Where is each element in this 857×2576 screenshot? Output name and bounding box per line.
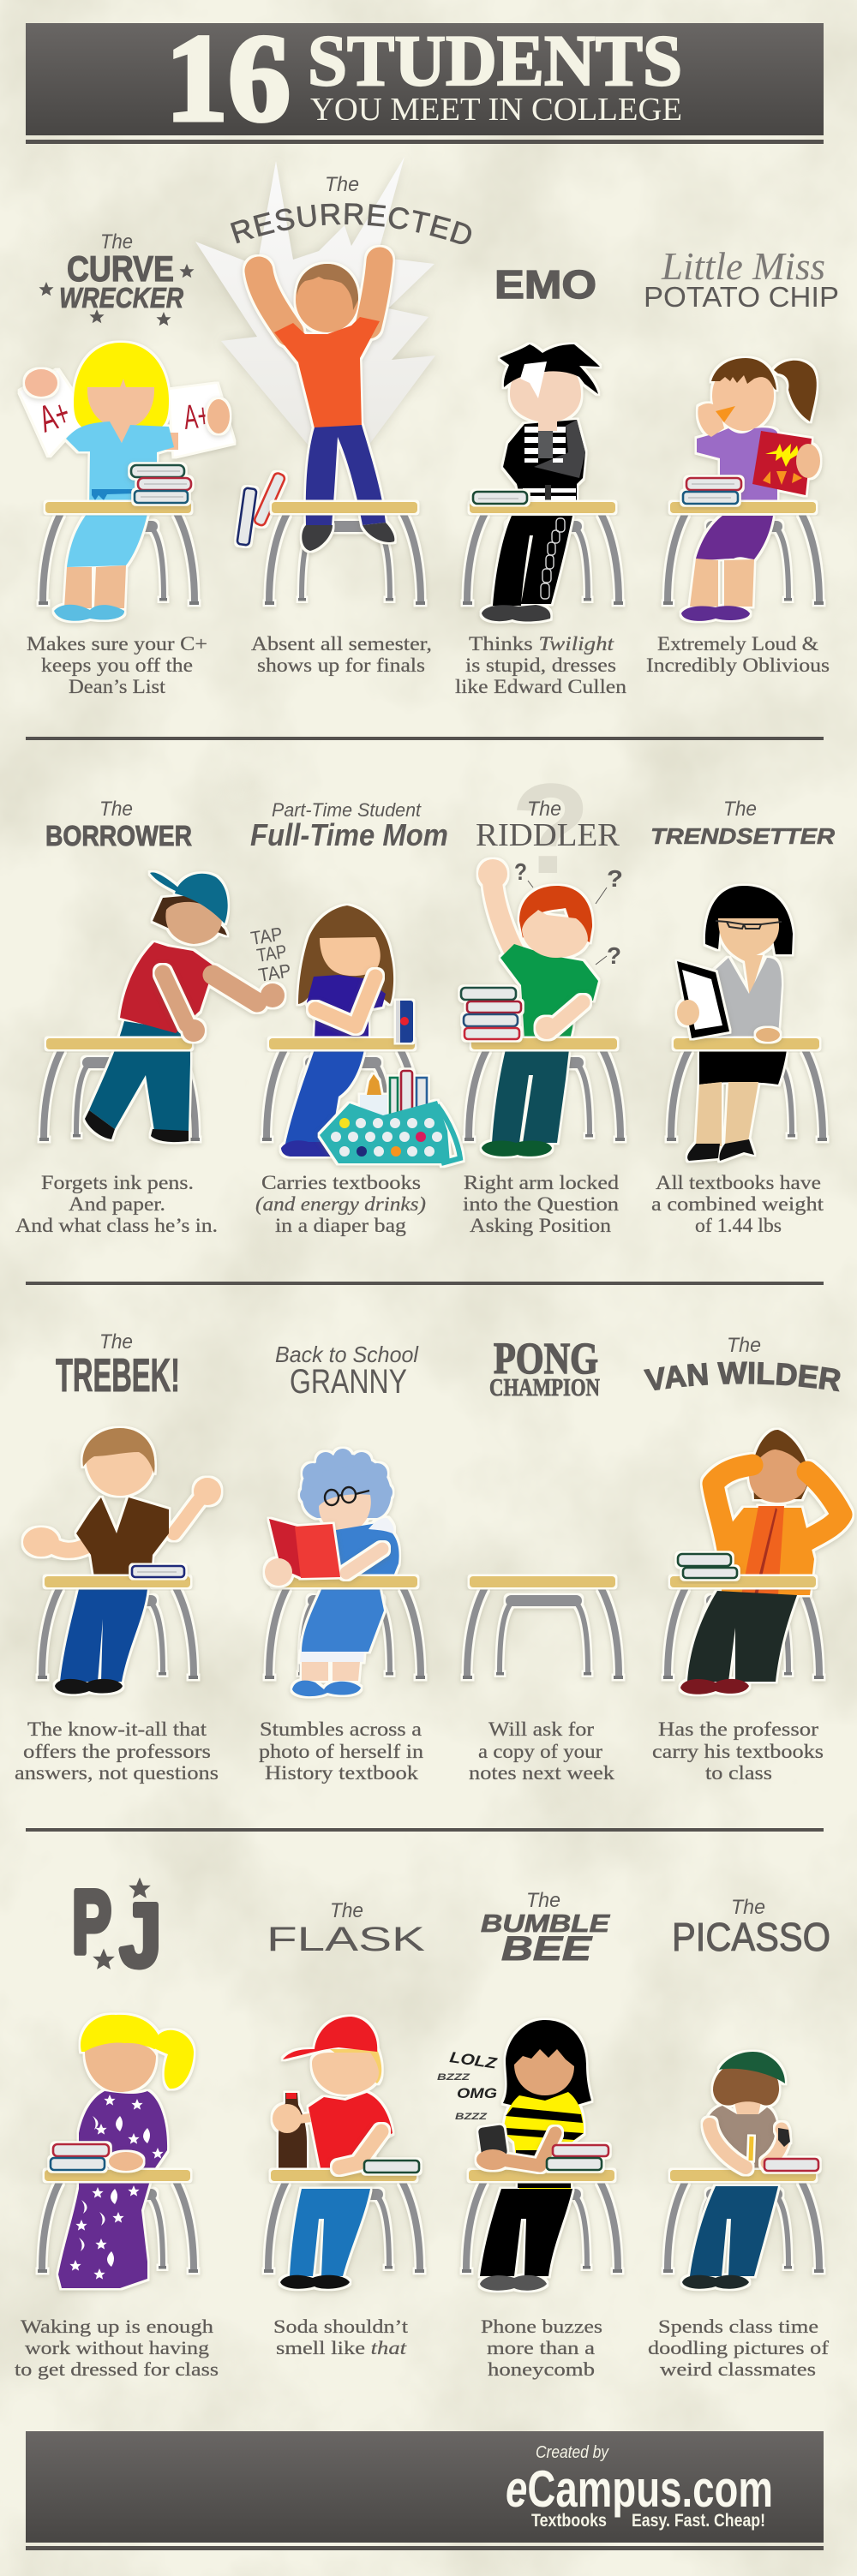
caption: The know-it-all that bbox=[27, 1718, 207, 1740]
caption: shows up for finals bbox=[257, 654, 425, 676]
glasses bbox=[716, 921, 782, 929]
heading: VAN WILDER bbox=[643, 1361, 840, 1391]
caption bbox=[469, 1718, 615, 1784]
phone buzz text: LOLZ bbox=[448, 2048, 499, 2072]
caption: offers the professors bbox=[23, 1741, 211, 1762]
question marks: ? bbox=[607, 942, 621, 969]
caption: Incredibly Oblivious bbox=[646, 654, 830, 676]
heading: The bbox=[731, 1896, 765, 1919]
caption: Absent all semester, bbox=[251, 633, 432, 654]
illustration bbox=[262, 905, 460, 1163]
caption: answers, not questions bbox=[15, 1762, 219, 1784]
panel: The Flask bbox=[264, 1899, 425, 2358]
caption: Makes sure your C+ bbox=[27, 633, 207, 654]
question marks: ? bbox=[514, 858, 527, 885]
footer banner bbox=[26, 2431, 824, 2550]
heading: Little Miss bbox=[661, 244, 825, 288]
heading bbox=[56, 1330, 180, 1402]
illustration bbox=[23, 1428, 221, 1694]
illustration bbox=[663, 2052, 824, 2289]
caption: Forgets ink pens. bbox=[41, 1172, 194, 1193]
heading: PICASSO bbox=[672, 1915, 830, 1959]
caption: into the Question bbox=[463, 1193, 620, 1215]
heading: POTATO CHIP bbox=[644, 281, 839, 313]
caption: Soda shouldn’t bbox=[273, 2316, 408, 2337]
panel: Emo bbox=[455, 262, 627, 697]
caption: weird classmates bbox=[660, 2358, 816, 2380]
tap text: TAP bbox=[257, 959, 292, 986]
caption bbox=[15, 1718, 219, 1784]
heading bbox=[230, 173, 471, 244]
caption: Asking Position bbox=[470, 1215, 612, 1236]
heading: WRECKER bbox=[59, 282, 183, 314]
caption bbox=[273, 2316, 408, 2358]
divider bbox=[26, 1828, 824, 1832]
title subline: YOU MEET IN COLLEGE bbox=[310, 92, 682, 128]
illustration bbox=[264, 2017, 424, 2289]
panel: The Riddler bbox=[461, 756, 625, 1236]
tap text bbox=[249, 923, 292, 986]
caption: keeps you off the bbox=[41, 654, 193, 676]
illustration: A+ bbox=[182, 397, 212, 437]
illustration bbox=[38, 2015, 198, 2288]
caption: more than a bbox=[487, 2337, 595, 2358]
heading: EMO bbox=[494, 262, 596, 307]
illustration bbox=[667, 886, 827, 1161]
question marks: ? bbox=[607, 865, 623, 892]
caption bbox=[27, 633, 207, 697]
caption bbox=[259, 1718, 424, 1784]
caption bbox=[15, 1172, 218, 1236]
tagline right: Easy. Fast. Cheap! bbox=[632, 2511, 765, 2531]
caption: And what class he’s in. bbox=[15, 1215, 218, 1236]
panel: Little Miss Potato Chip bbox=[644, 244, 839, 676]
heading: BUMBLE bbox=[481, 1910, 611, 1938]
caption: is stupid, dresses bbox=[465, 654, 616, 676]
heading bbox=[476, 756, 620, 900]
caption: smell like that bbox=[276, 2337, 407, 2358]
heading bbox=[267, 1899, 425, 1958]
heading bbox=[644, 244, 839, 313]
logo: eCampus.com bbox=[506, 2460, 773, 2518]
heading: PONG bbox=[494, 1335, 598, 1384]
caption: Right arm locked bbox=[464, 1172, 620, 1193]
panel: The Borrower bbox=[15, 798, 285, 1236]
caption bbox=[481, 2316, 602, 2380]
heading bbox=[250, 799, 448, 852]
heading: Part-Time Student bbox=[272, 799, 422, 821]
heading: The bbox=[527, 798, 561, 821]
heading: The bbox=[330, 1899, 363, 1922]
heading bbox=[72, 1873, 161, 1986]
phone buzz text: BZZZ bbox=[437, 2072, 471, 2083]
caption bbox=[463, 1172, 620, 1236]
caption: Carries textbooks bbox=[261, 1172, 421, 1193]
caption: a combined weight bbox=[651, 1193, 824, 1215]
panel: The Resurrected bbox=[195, 158, 471, 677]
phone buzz text bbox=[437, 2048, 499, 2122]
heading bbox=[39, 230, 195, 326]
caption: Dean’s List bbox=[69, 676, 166, 697]
caption: notes next week bbox=[469, 1762, 615, 1784]
panel: PJ bbox=[15, 1873, 219, 2380]
caption: Phone buzzes bbox=[481, 2316, 602, 2337]
caption: of 1.44 lbs bbox=[695, 1215, 782, 1236]
panel: The Trebek bbox=[15, 1330, 221, 1784]
paper marks: A+ bbox=[34, 391, 75, 441]
header banner bbox=[26, 9, 824, 147]
heading: The bbox=[99, 1330, 133, 1354]
illustration bbox=[237, 260, 425, 605]
illustration bbox=[461, 859, 625, 1157]
caption bbox=[652, 1718, 824, 1784]
panel: Part-Time Student, Full-Time Mom bbox=[249, 799, 460, 1236]
panel: The Bumble Bee bbox=[437, 1889, 622, 2380]
heading: BEE bbox=[501, 1930, 593, 1968]
caption: Stumbles across a bbox=[260, 1718, 422, 1740]
illustration bbox=[265, 1449, 425, 1696]
heading bbox=[489, 1335, 600, 1402]
tagline left: Textbooks bbox=[531, 2511, 607, 2531]
caption: All textbooks have bbox=[656, 1172, 821, 1193]
caption: Will ask for bbox=[488, 1718, 594, 1740]
illustration bbox=[39, 872, 285, 1142]
illustration bbox=[462, 2020, 622, 2291]
panel: Pong Champion bbox=[463, 1335, 623, 1784]
caption: like Edward Cullen bbox=[455, 676, 627, 697]
heading: BORROWER bbox=[45, 820, 192, 852]
heading: P bbox=[72, 1873, 111, 1972]
heading: TREBEK! bbox=[56, 1348, 180, 1402]
heading: CURVE bbox=[67, 248, 174, 289]
caption bbox=[646, 633, 830, 676]
caption: carry his textbooks bbox=[652, 1741, 824, 1762]
phone buzz text: OMG bbox=[457, 2085, 497, 2101]
panel: The Trendsetter bbox=[650, 798, 835, 1236]
caption: to get dressed for class bbox=[15, 2358, 219, 2380]
caption: doodling pictures of bbox=[648, 2337, 830, 2358]
caption bbox=[251, 633, 432, 676]
panel: The Van Wilder bbox=[643, 1334, 857, 1784]
caption bbox=[455, 633, 627, 697]
heading: The bbox=[723, 798, 757, 821]
divider bbox=[26, 1282, 824, 1285]
heading bbox=[643, 1334, 840, 1391]
heading: CHAMPION bbox=[489, 1374, 600, 1402]
heading: The bbox=[325, 173, 359, 196]
heading bbox=[275, 1342, 419, 1401]
caption: to class bbox=[705, 1762, 772, 1784]
illustration bbox=[20, 343, 234, 621]
illustration bbox=[663, 358, 824, 621]
heading: TRENDSETTER bbox=[650, 823, 835, 849]
heading: The bbox=[526, 1889, 560, 1912]
heading bbox=[672, 1896, 830, 1959]
caption: Has the professor bbox=[658, 1718, 818, 1740]
pyjama pattern bbox=[69, 2095, 164, 2280]
illustration bbox=[663, 1430, 842, 1694]
heading bbox=[481, 1889, 611, 1968]
panel: The Picasso bbox=[648, 1896, 830, 2380]
tap text: TAP bbox=[255, 941, 288, 966]
heading: The bbox=[99, 798, 133, 821]
heading: Full-Time Mom bbox=[250, 817, 448, 852]
burst bbox=[195, 157, 435, 445]
caption: honeycomb bbox=[488, 2358, 595, 2380]
heading: Back to School bbox=[275, 1342, 419, 1367]
caption bbox=[651, 1172, 824, 1236]
caption: in a diaper bag bbox=[275, 1215, 407, 1236]
caption: Extremely Loud & bbox=[657, 633, 818, 654]
caption: a copy of your bbox=[478, 1741, 602, 1762]
caption: History textbook bbox=[265, 1762, 419, 1784]
phone buzz text: BZZZ bbox=[455, 2112, 488, 2122]
tap text: TAP bbox=[249, 923, 284, 949]
caption: And paper. bbox=[69, 1193, 165, 1215]
illustration bbox=[463, 344, 623, 622]
heading: J bbox=[120, 1886, 161, 1986]
heading: The bbox=[100, 230, 133, 254]
illustration: empty desk bbox=[463, 1576, 623, 1679]
title main: STUDENTS bbox=[308, 21, 682, 101]
heading: The bbox=[727, 1334, 761, 1357]
question marks bbox=[514, 858, 623, 969]
heading: ? bbox=[511, 756, 590, 900]
heading: FLASK bbox=[267, 1921, 425, 1958]
title number: 16 bbox=[165, 9, 291, 147]
heading: RIDDLER bbox=[476, 817, 620, 853]
heading bbox=[45, 798, 192, 852]
caption bbox=[15, 2316, 219, 2380]
panel: Back to School Granny bbox=[259, 1342, 425, 1784]
glasses bbox=[325, 1487, 369, 1505]
heading: RESURRECTED bbox=[230, 203, 471, 244]
caption: (and energy drinks) bbox=[255, 1193, 426, 1215]
caption bbox=[255, 1172, 426, 1236]
caption: Thinks Twilight bbox=[469, 633, 614, 654]
panel: The Curve Wrecker bbox=[20, 230, 234, 697]
caption bbox=[648, 2316, 830, 2380]
heading: GRANNY bbox=[290, 1363, 407, 1401]
divider bbox=[26, 737, 824, 740]
caption: photo of herself in bbox=[259, 1741, 424, 1762]
caption: Spends class time bbox=[658, 2316, 818, 2337]
credit: Created by bbox=[536, 2443, 609, 2462]
heading bbox=[650, 798, 835, 849]
caption: Waking up is enough bbox=[21, 2316, 213, 2337]
caption: work without having bbox=[25, 2337, 209, 2358]
